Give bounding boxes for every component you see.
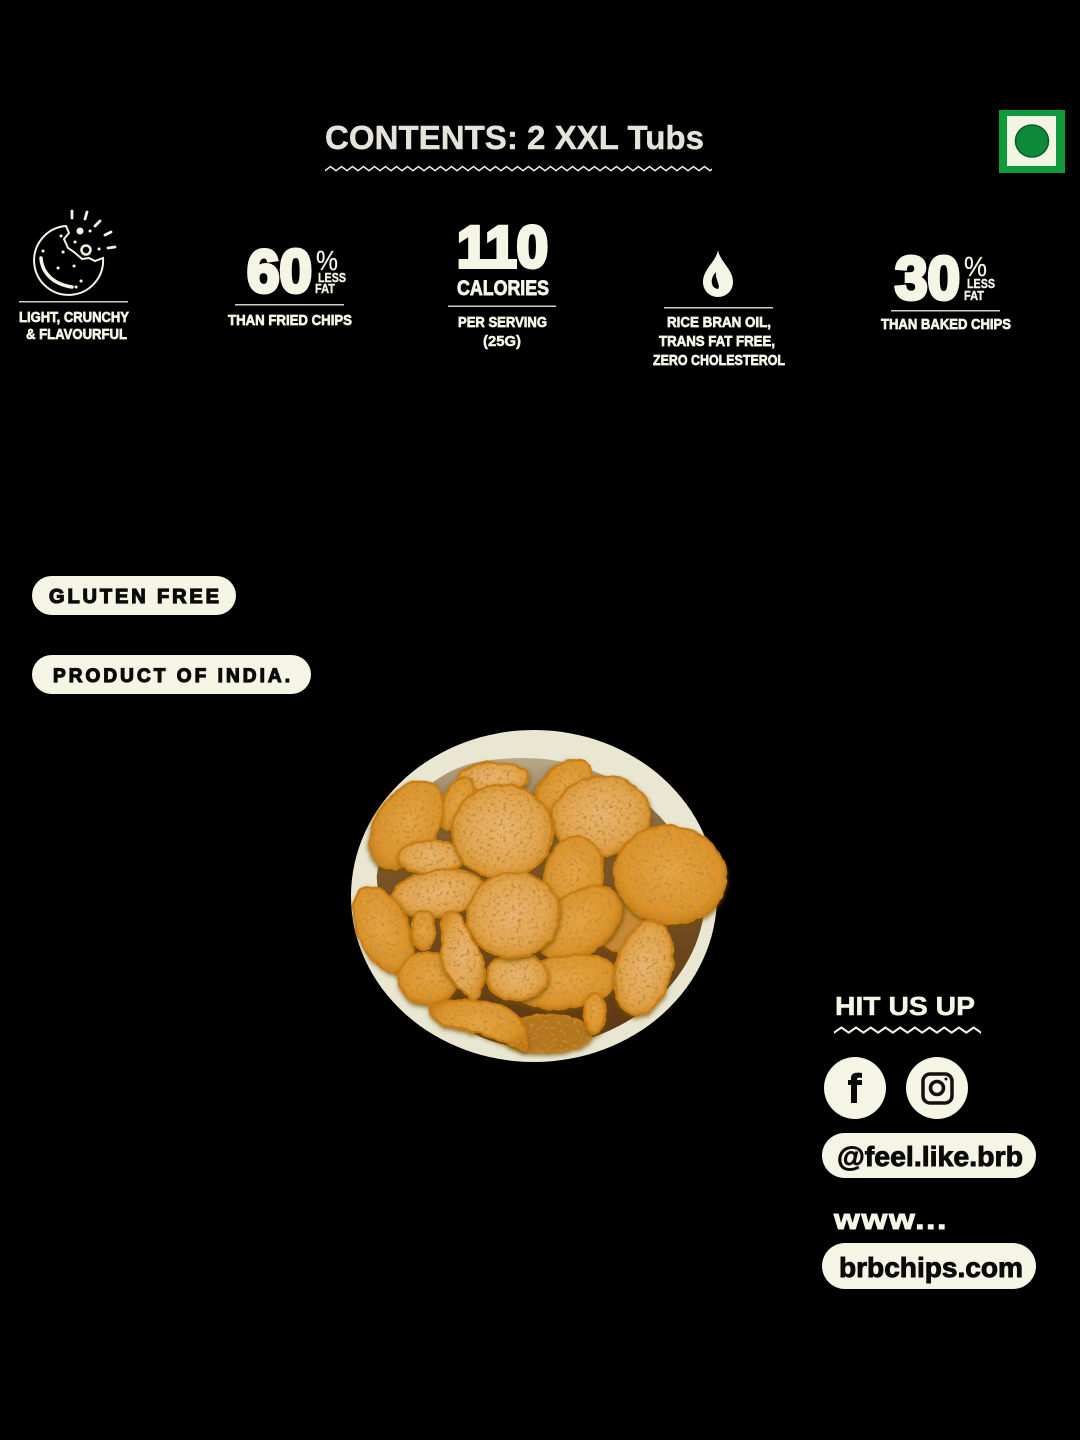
bowl: [351, 730, 717, 1062]
badge: product of india: PRODUCT OF INDIA.: [53, 666, 290, 687]
caption: [653, 315, 785, 369]
feature: 60% less fat: THAN FRIED CHIPS: [228, 313, 352, 329]
www label: www...: [833, 1204, 948, 1236]
caption: & FLAVOURFUL: [26, 327, 127, 343]
title: [325, 119, 712, 173]
feature: 60% less fat: %: [316, 245, 338, 276]
feature: 30% less fat: LESS: [967, 276, 995, 291]
icon: vegetarian mark: [999, 110, 1065, 173]
title: CONTENTS: 2 XXL Tubs: [325, 119, 704, 156]
caption: RICE BRAN OIL,: [667, 315, 771, 331]
feature: 60% less fat: 60: [247, 238, 312, 305]
caption: LIGHT, CRUNCHY: [19, 310, 129, 326]
feature: 110 calories: PER SERVING: [458, 315, 547, 331]
product photo: bowl of chips: [341, 730, 734, 1062]
feature: 60% less fat: [228, 238, 352, 329]
caption: TRANS FAT FREE,: [659, 334, 775, 350]
icon: instagram: [906, 1057, 968, 1119]
icon: bitten cookie: [34, 211, 115, 295]
feature: 110 calories: [448, 215, 556, 350]
feature: rice bran oil: [653, 250, 785, 369]
feature: 30% less fat: THAN BAKED CHIPS: [881, 317, 1011, 333]
handle pill: [822, 1133, 1036, 1178]
chips: [341, 749, 734, 1052]
caption: ZERO CHOLESTEROL: [653, 353, 785, 369]
feature: 30% less fat: FAT: [964, 288, 984, 303]
feature: 30% less fat: %: [964, 251, 987, 282]
website pill: brbchips.com: [839, 1252, 1023, 1283]
badge: gluten free: GLUTEN FREE: [49, 586, 219, 608]
icon: oil drop: [703, 250, 733, 297]
feature: 110 calories: CALORIES: [457, 277, 549, 300]
section: hit us up: [834, 991, 981, 1035]
icon: facebook: [824, 1057, 886, 1119]
caption: [19, 310, 129, 343]
badge: product of india: [32, 655, 311, 694]
feature: 30% less fat: [881, 245, 1011, 333]
feature: light and crunchy: [19, 211, 129, 343]
feature: 110 calories: 110: [457, 215, 548, 280]
feature: 60% less fat: LESS: [318, 270, 346, 285]
feature: 60% less fat: FAT: [315, 281, 335, 296]
handle pill: @feel.like.brb: [837, 1141, 1023, 1172]
feature: 30% less fat: 30: [895, 245, 960, 312]
website pill: [822, 1243, 1036, 1289]
feature: 110 calories: (25G): [483, 333, 521, 350]
section: hit us up: HIT US UP: [835, 991, 975, 1021]
badge: gluten free: [32, 576, 236, 615]
